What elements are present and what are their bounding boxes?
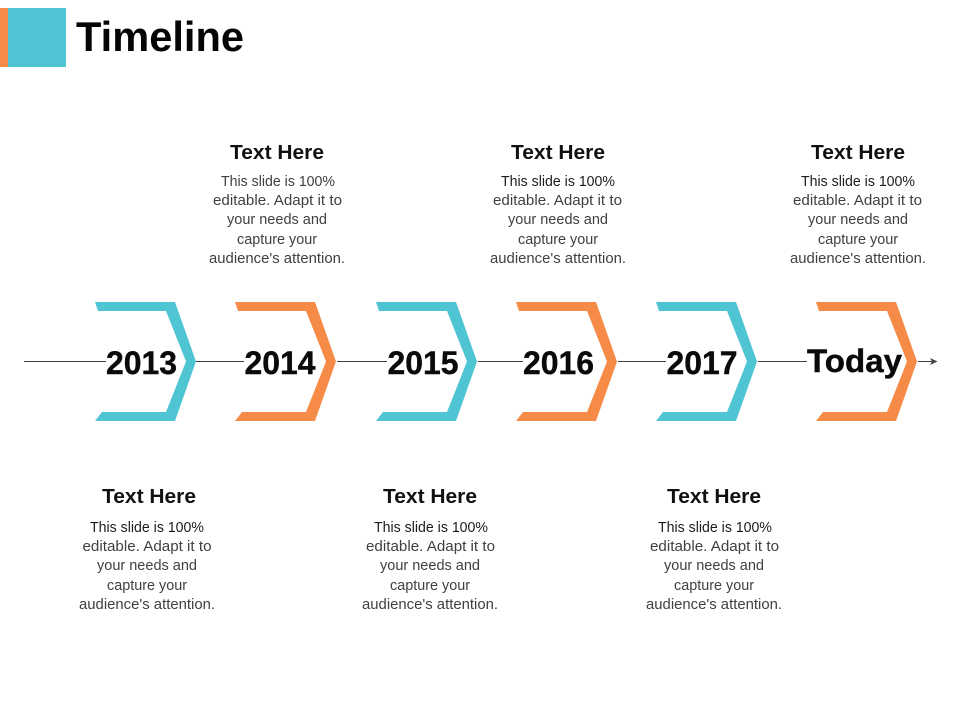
chevron today [816,302,917,421]
text block today: audience's attention. [790,251,926,267]
text block 2014: editable. Adapt it to [213,193,342,209]
chevron 2015 [376,302,477,421]
text block today: your needs and [808,212,908,228]
year 2015: 2015 [388,345,458,381]
text block 2014 [209,142,345,267]
text block 2016: audience's attention. [490,251,626,267]
text block today: capture your [818,232,898,248]
text block 2014: audience's attention. [209,251,345,267]
header icon [0,8,66,67]
year 2017: 2017 [666,345,738,381]
text block 2015: capture your [390,578,470,594]
text block 2016 [490,142,626,267]
text block 2015: your needs and [380,558,480,574]
text block 2014: This slide is 100% [221,174,335,190]
chevron 2014 [235,302,336,421]
text block 2017: audience's attention. [646,597,782,613]
chevron 2017 [656,302,757,421]
text block 2017: your needs and [664,558,764,574]
text block 2015: audience's attention. [362,597,498,613]
label today: Today [807,343,902,379]
chevron 2016 [516,302,617,421]
chevron 2013 [95,302,196,421]
text block 2013: your needs and [97,558,197,574]
text block 2014: Text Here [230,142,324,164]
text block today: editable. Adapt it to [793,193,922,209]
text block 2013: editable. Adapt it to [82,539,212,555]
text block 2015 [362,486,498,613]
year 2013: 2013 [106,345,177,381]
text block 2016: editable. Adapt it to [493,193,622,209]
year 2016: 2016 [523,345,594,381]
text block 2017: capture your [674,578,754,594]
text block 2016: capture your [518,232,598,248]
text block 2017: This slide is 100% [658,520,772,536]
text block 2017: editable. Adapt it to [650,539,779,555]
text block 2015: Text Here [383,486,477,508]
text block 2016: This slide is 100% [501,174,615,190]
text block 2014: your needs and [227,212,327,228]
text block 2017: Text Here [667,486,761,508]
title: Timeline [76,13,244,60]
text block 2016: your needs and [508,212,608,228]
text block 2015: editable. Adapt it to [366,539,495,555]
text block 2016: Text Here [511,142,605,164]
text block 2015: This slide is 100% [374,520,488,536]
text block 2013: audience's attention. [79,597,215,613]
text block today [790,142,926,267]
text block 2013: Text Here [102,486,196,508]
text block 2013 [79,486,215,613]
text block 2013: This slide is 100% [90,520,204,536]
text block 2017 [646,486,782,613]
text block 2013: capture your [107,578,187,594]
text block today: This slide is 100% [801,174,915,190]
timeline axis arrow [24,358,938,365]
text block 2014: capture your [237,232,317,248]
text block today: Text Here [811,142,905,164]
year 2014: 2014 [244,345,316,381]
